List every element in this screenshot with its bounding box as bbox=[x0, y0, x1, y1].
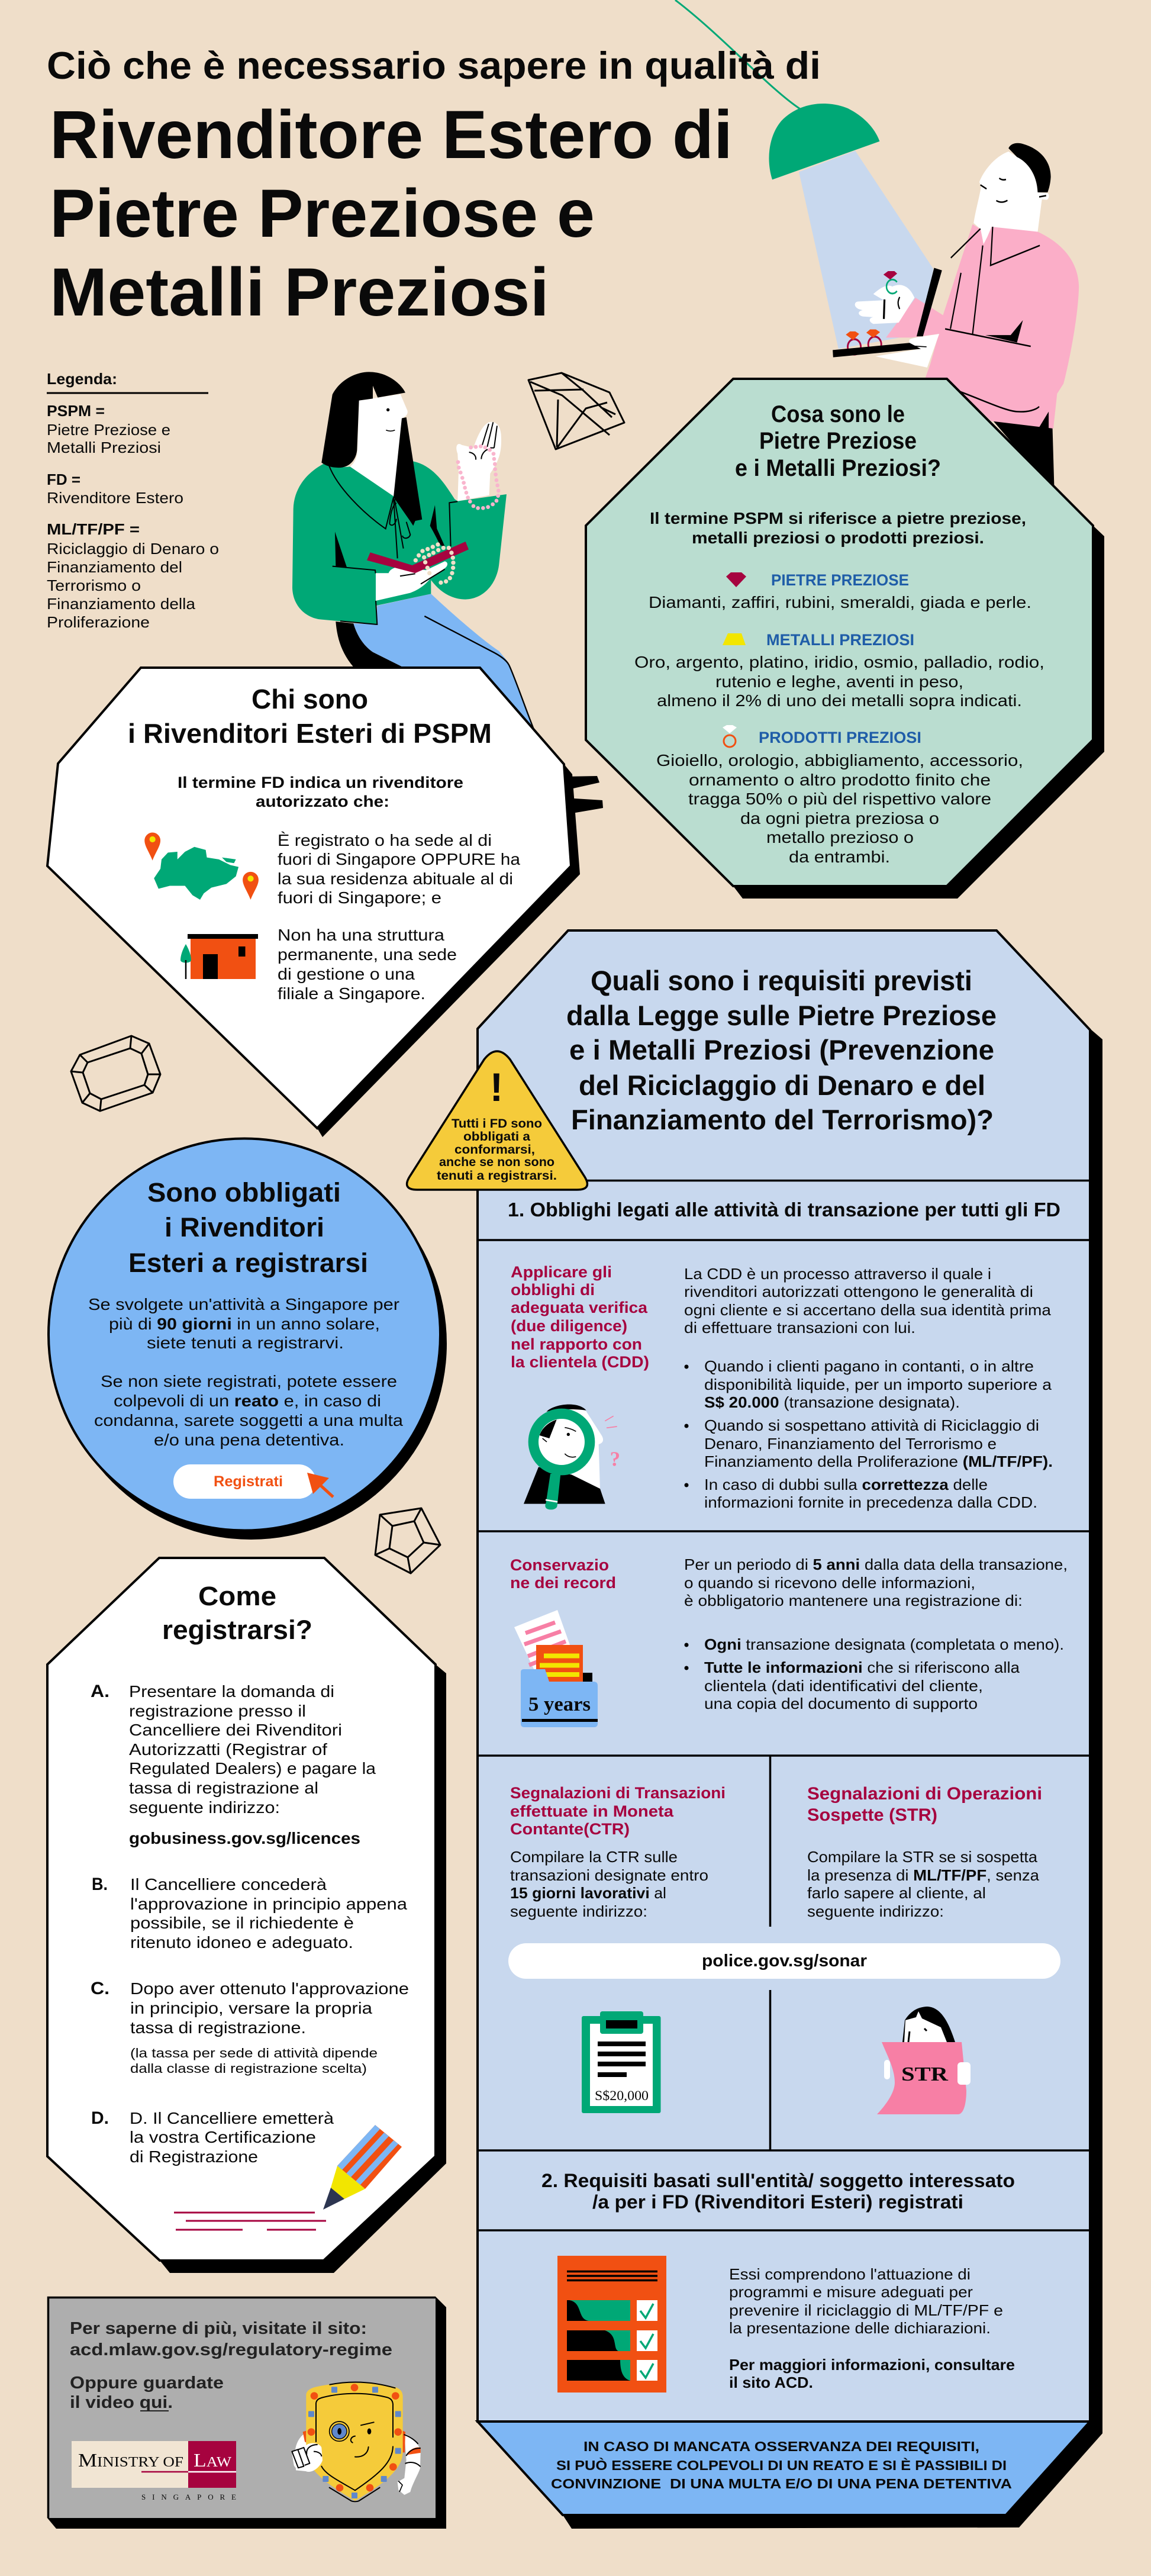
heading: obliged to register: Sono obbligati bbox=[147, 1177, 341, 1208]
logo: Ministry of Law: LAW bbox=[194, 2449, 231, 2471]
step A: Cancelliere dei Rivenditori bbox=[129, 1721, 342, 1739]
text: CDD explanation: S$ 20.000 (transazione designata). bbox=[704, 1393, 960, 1411]
banner: penalty warning: SI PUÒ ESSERE COLPEVOLI DI UN REATO E SI È PASSIBILI DI bbox=[556, 2457, 1007, 2473]
heading: requirements under the Act: del Riciclaggio di Denaro e del bbox=[579, 1070, 985, 1101]
text: precious products: da ogni pietra preziosa o bbox=[740, 809, 939, 827]
step B: Il Cancelliere concederà bbox=[130, 1875, 327, 1894]
text: precious stones: Diamanti, zaffiri, rubini, smeraldi, giada e perle. bbox=[649, 593, 1031, 611]
heading: CTR: Segnalazioni di Transazioni bbox=[510, 1784, 726, 1802]
text: entity requirements: il sito ACD. bbox=[729, 2374, 813, 2391]
title bbox=[47, 44, 821, 330]
callout: warning triangle: ! bbox=[490, 1065, 503, 1110]
callout: warning triangle bbox=[407, 1051, 587, 1190]
text: 90 days rule: siete tenuti a registrarvi. bbox=[147, 1334, 344, 1352]
panel: how to register bbox=[47, 1558, 446, 2273]
text: precious products: Gioiello, orologio, abbigliamento, accessorio, bbox=[656, 751, 1023, 769]
heading: record keeping bbox=[510, 1556, 616, 1592]
legend: Proliferazione bbox=[47, 613, 150, 631]
callout: warning triangle: anche se non sono bbox=[439, 1155, 554, 1169]
text: CDD explanation: informazioni fornite in precedenza dalla CDD. bbox=[704, 1493, 1037, 1511]
step A: Autorizzatti (Registrar of bbox=[129, 1740, 327, 1759]
text: CDD explanation: ogni cliente e si accertano della sua identità prima bbox=[684, 1301, 1052, 1319]
heading: STR: Segnalazioni di Operazioni bbox=[807, 1784, 1042, 1804]
text: CTR: 15 giorni lavorativi al bbox=[510, 1884, 666, 1902]
heading: who are FD: Chi sono bbox=[252, 684, 368, 714]
heading: CDD: la clientela (CDD) bbox=[511, 1353, 649, 1371]
step A: A. bbox=[91, 1682, 109, 1701]
callout: warning triangle: conformarsi, bbox=[454, 1143, 535, 1157]
legend bbox=[47, 370, 219, 631]
text: entity requirements: programmi e misure adeguati per bbox=[729, 2283, 973, 2301]
step A: Regulated Dealers) e pagare la bbox=[129, 1759, 376, 1778]
legend: PSPM = bbox=[47, 402, 105, 420]
text: 90 days rule: più di 90 giorni in un anno solare, bbox=[109, 1315, 380, 1333]
heading: CDD: nel rapporto con bbox=[511, 1335, 642, 1353]
text: precious metals: METALLI PREZIOSI bbox=[766, 631, 914, 649]
title: Ciò che è necessario sapere in qualità di bbox=[47, 44, 821, 87]
legend: Terrorismo o bbox=[47, 577, 141, 594]
step C: (la tassa per sede di attività dipende bbox=[130, 2046, 378, 2060]
icon: gold bar bbox=[723, 633, 746, 645]
heading: requirements under the Act: dalla Legge sulle Pietre Preziose bbox=[566, 1000, 997, 1031]
text: no permanent establishment: Non ha una struttura bbox=[278, 926, 444, 944]
heading: obliged to register: i Rivenditori bbox=[165, 1212, 324, 1242]
step D: la vostra Certificazione bbox=[130, 2128, 316, 2146]
text: precious products: PRODOTTI PREZIOSI bbox=[759, 729, 921, 746]
heading: CDD bbox=[511, 1263, 649, 1371]
icon: checklist document bbox=[557, 2256, 666, 2393]
button: register bbox=[173, 1464, 316, 1499]
step D bbox=[91, 2108, 334, 2166]
text: STR: seguente indirizzo: bbox=[807, 1902, 944, 1920]
step A: seguente indirizzo: bbox=[129, 1798, 280, 1817]
heading: STR: Sospette (STR) bbox=[807, 1805, 937, 1825]
heading: requirements under the Act: Finanziamento del Terrorismo)? bbox=[571, 1104, 994, 1135]
text: CDD explanation: La CDD è un processo attraverso il quale i bbox=[684, 1265, 991, 1283]
icon: building bbox=[180, 934, 258, 979]
text: registered outside Singapore: fuori di Singapore OPPURE ha bbox=[278, 850, 520, 868]
text: precious metals: Oro, argento, platino, iridio, osmio, palladio, rodio, bbox=[634, 653, 1044, 671]
heading: how to register: registrarsi? bbox=[162, 1615, 312, 1645]
step A: gobusiness.gov.sg/licences bbox=[129, 1829, 360, 1847]
heading: section 2: 2. Requisiti basati sull'entità/ soggetto interessato bbox=[541, 2170, 1015, 2191]
step A: tassa di registrazione al bbox=[129, 1779, 318, 1797]
text: 90 days rule: condanna, sarete soggetti a una multa bbox=[94, 1411, 403, 1429]
text: entity requirements: la presentazione delle dichiarazioni. bbox=[729, 2319, 991, 2337]
heading: CDD: obblighi di bbox=[511, 1281, 595, 1299]
title: Rivenditore Estero di bbox=[50, 97, 733, 173]
heading: obliged to register bbox=[128, 1177, 368, 1278]
text: precious products bbox=[656, 729, 1023, 866]
panel: requirements bbox=[478, 930, 1102, 2529]
text: 90 days rule: e/o una pena detentiva. bbox=[154, 1431, 344, 1449]
text: precious stones: PIETRE PREZIOSE bbox=[771, 571, 909, 589]
heading: CDD: Applicare gli bbox=[511, 1263, 612, 1281]
illustration: woman with pearls bbox=[292, 372, 534, 729]
heading: who are FD: i Rivenditori Esteri di PSPM bbox=[128, 718, 492, 749]
button: register: Registrati bbox=[214, 1473, 283, 1490]
step B: B. bbox=[92, 1875, 108, 1894]
step B: l'approvazione in principio appena bbox=[130, 1895, 407, 1913]
icon: Singapore map with pins bbox=[144, 833, 259, 900]
heading: section 2 bbox=[541, 2170, 1015, 2213]
text: FD definition: Il termine FD indica un rivenditore bbox=[178, 774, 463, 791]
legend: Legenda: bbox=[47, 370, 117, 388]
heading: how to register bbox=[162, 1581, 312, 1645]
text: visit the site: Per saperne di più, visitate il sito: bbox=[70, 2319, 367, 2338]
text: record keeping bbox=[684, 1556, 1068, 1712]
text: 90 days rule bbox=[88, 1295, 403, 1449]
step C: dalla classe di registrazione scelta) bbox=[130, 2061, 367, 2076]
text: CDD explanation: Denaro, Finanziamento del Terrorismo e bbox=[704, 1435, 997, 1453]
callout: warning triangle: Tutti i FD sono bbox=[452, 1117, 542, 1131]
step C: Dopo aver ottenuto l'approvazione bbox=[130, 1979, 409, 1998]
panel: must register bbox=[49, 1139, 447, 1540]
icon: pencil writing bbox=[174, 2125, 402, 2230]
heading: what are PSPM bbox=[735, 401, 941, 481]
heading: STR bbox=[807, 1784, 1042, 1825]
heading: who are FD bbox=[128, 684, 492, 749]
text: visit the site: acd.mlaw.gov.sg/regulatory-regime bbox=[70, 2340, 392, 2359]
text: PSPM definition bbox=[650, 509, 1026, 547]
heading: what are PSPM: Pietre Preziose bbox=[759, 428, 917, 454]
text: FD definition: autorizzato che: bbox=[256, 793, 389, 810]
icon: diamond ring bbox=[723, 725, 737, 747]
heading: CTR: Contante(CTR) bbox=[510, 1820, 630, 1838]
step B: ritenuto idoneo e adeguato. bbox=[130, 1933, 353, 1952]
legend: ML/TF/PF = bbox=[47, 520, 140, 538]
heading: what are PSPM: Cosa sono le bbox=[771, 401, 905, 427]
step D: D. Il Cancelliere emetterà bbox=[130, 2109, 334, 2127]
text: precious products: ornamento o altro prodotto finito che bbox=[689, 771, 991, 789]
text: record keeping: una copia del documento di supporto bbox=[704, 1695, 978, 1712]
text: entity requirements: Essi comprendono l'attuazione di bbox=[729, 2265, 971, 2283]
banner: penalty warning: CONVINZIONE DI UNA MULTA E/O DI UNA PENA DETENTIVA bbox=[551, 2476, 1012, 2491]
text: entity requirements: prevenire il riciclaggio di ML/TF/PF e bbox=[729, 2301, 1003, 2319]
step B: possibile, se il richiedente è bbox=[130, 1914, 354, 1932]
icon: 5 years folder bbox=[514, 1610, 598, 1727]
legend: Finanziamento del bbox=[47, 558, 182, 576]
icon: 5 years folder: 5 years bbox=[528, 1693, 591, 1715]
text: CDD explanation: Quando si sospettano attività di Riciclaggio di bbox=[704, 1416, 1039, 1434]
text: STR: farlo sapere al cliente, al bbox=[807, 1884, 986, 1902]
text: registered outside Singapore: fuori di Singapore; e bbox=[278, 888, 441, 907]
logo: Ministry of Law bbox=[72, 2441, 236, 2501]
legend: Rivenditore Estero bbox=[47, 489, 183, 507]
text: no permanent establishment: di gestione o una bbox=[278, 965, 415, 983]
heading: CTR bbox=[510, 1784, 726, 1838]
icon: octagon gem outline bbox=[71, 1036, 160, 1111]
logo: Ministry of Law: MINISTRY OF bbox=[78, 2449, 183, 2471]
text: 90 days rule: colpevoli di un reato e, in caso di bbox=[114, 1392, 381, 1410]
heading: CTR: effettuate in Moneta bbox=[510, 1802, 674, 1820]
text: STR bbox=[807, 1848, 1040, 1920]
text: CDD explanation: Quando i clienti pagano in contanti, o in altre bbox=[704, 1357, 1034, 1375]
heading: requirements under the Act: e i Metalli Preziosi (Prevenzione bbox=[569, 1034, 994, 1065]
legend: FD = bbox=[47, 471, 80, 488]
text: PSPM definition: Il termine PSPM si riferisce a pietre preziose, bbox=[650, 509, 1026, 527]
text: precious metals: almeno il 2% di uno dei metalli sopra indicati. bbox=[657, 691, 1022, 710]
text: record keeping: è obbligatorio mantenere una registrazione di: bbox=[684, 1592, 1023, 1609]
text: precious metals bbox=[634, 631, 1044, 710]
legend: Metalli Preziosi bbox=[47, 439, 161, 456]
text: 90 days rule: Se non siete registrati, potete essere bbox=[101, 1372, 397, 1390]
text: CDD explanation: In caso di dubbi sulla correttezza delle bbox=[704, 1476, 988, 1493]
step C: tassa di registrazione. bbox=[130, 2018, 306, 2037]
heading: record keeping: Conservazio bbox=[510, 1556, 609, 1574]
text: record keeping: o quando si ricevono delle informazioni, bbox=[684, 1574, 975, 1592]
text: CTR: Compilare la CTR sulle bbox=[510, 1848, 678, 1866]
icon: red gem bbox=[726, 572, 746, 587]
heading: CDD: (due diligence) bbox=[511, 1317, 627, 1335]
link pill: police.gov.sg/sonar: police.gov.sg/sonar bbox=[702, 1952, 867, 1970]
panel: what are precious stones and metals bbox=[586, 379, 1104, 899]
text: CDD explanation: disponibilità liquide, per un importo superiore a bbox=[704, 1376, 1052, 1393]
text: CTR: seguente indirizzo: bbox=[510, 1902, 647, 1920]
step B bbox=[92, 1875, 407, 1952]
icon: man with magnifier: ? bbox=[610, 1448, 620, 1471]
step A: Presentare la domanda di bbox=[129, 1682, 334, 1701]
title: Pietre Preziose e bbox=[50, 176, 595, 252]
heading: section 2: /a per i FD (Rivenditori Esteri) registrati bbox=[592, 2191, 963, 2213]
text: STR: Compilare la STR se si sospetta bbox=[807, 1848, 1038, 1866]
text: no permanent establishment: permanente, una sede bbox=[278, 945, 457, 964]
icon: pentagon gem outline bbox=[375, 1508, 440, 1573]
text: precious products: da entrambi. bbox=[789, 848, 890, 866]
icon: woman holding STR paper bbox=[877, 2007, 971, 2114]
step A: registrazione presso il bbox=[129, 1702, 306, 1720]
icon: man with magnifier bbox=[524, 1405, 620, 1509]
step D: di Registrazione bbox=[130, 2147, 258, 2166]
text: CDD explanation: Finanziamento della Proliferazione (ML/TF/PF). bbox=[704, 1453, 1053, 1470]
legend: Pietre Preziose e bbox=[47, 421, 170, 439]
text: registered outside Singapore: È registrato o ha sede al di bbox=[278, 831, 492, 849]
text: entity requirements bbox=[729, 2265, 1015, 2391]
step A bbox=[91, 1682, 376, 1847]
text: precious products: metallo prezioso o bbox=[766, 828, 914, 846]
text: CTR: transazioni designate entro bbox=[510, 1866, 708, 1884]
logo: Ministry of Law: SINGAPORE bbox=[141, 2493, 236, 2501]
text: record keeping: clientela (dati identificativi del cliente, bbox=[704, 1677, 983, 1695]
banner: penalty warning bbox=[478, 2422, 1090, 2515]
text: no permanent establishment: filiale a Singapore. bbox=[278, 984, 425, 1003]
title: Metalli Preziosi bbox=[50, 255, 549, 330]
text: FD definition bbox=[178, 774, 463, 810]
heading: what are PSPM: e i Metalli Preziosi? bbox=[735, 455, 941, 481]
heading: record keeping: ne dei record bbox=[510, 1574, 616, 1592]
illustration: jeweller under lamp bbox=[675, 0, 1079, 485]
text: record keeping: Tutte le informazioni che si riferiscono alla bbox=[704, 1659, 1020, 1676]
panel: more information bbox=[47, 2297, 446, 2529]
heading: section 1: 1. Obblighi legati alle attività di transazione per tutti gli FD bbox=[508, 1199, 1060, 1221]
banner: penalty warning: IN CASO DI MANCATA OSSERVANZA DEI REQUISITI, bbox=[583, 2439, 979, 2454]
heading: CDD: adeguata verifica bbox=[511, 1299, 648, 1316]
text: registered outside Singapore: la sua residenza abituale al di bbox=[278, 870, 513, 888]
icon: diamond outline bbox=[528, 373, 624, 449]
step C: in principio, versare la propria bbox=[130, 1999, 372, 2017]
legend: Finanziamento della bbox=[47, 595, 196, 613]
illustration: shield mascot bbox=[292, 2382, 421, 2501]
text: CDD explanation: di effettuare transazioni con lui. bbox=[684, 1319, 915, 1337]
heading: how to register: Come bbox=[198, 1581, 276, 1611]
panel: who are foreign dealers bbox=[47, 668, 603, 1137]
step C bbox=[91, 1979, 409, 2076]
link pill: police.gov.sg/sonar bbox=[508, 1943, 1060, 1979]
text: entity requirements: Per maggiori informazioni, consultare bbox=[729, 2356, 1015, 2374]
text: registered outside Singapore bbox=[278, 831, 520, 907]
text: STR: la presenza di ML/TF/PF , senza bbox=[807, 1866, 1040, 1884]
icon: woman holding STR paper: STR bbox=[901, 2063, 949, 2085]
text: CDD explanation bbox=[684, 1265, 1053, 1511]
heading: requirements under the Act: Quali sono i requisiti previsti bbox=[591, 965, 972, 996]
heading: obliged to register: Esteri a registrarsi bbox=[128, 1248, 368, 1278]
step C: C. bbox=[91, 1979, 109, 1998]
text: visit the site: il video qui. bbox=[70, 2393, 173, 2412]
text: record keeping: Ogni transazione designata (completata o meno). bbox=[704, 1635, 1064, 1653]
text: 90 days rule: Se svolgete un'attività a Singapore per bbox=[88, 1295, 399, 1313]
arrow: to register button bbox=[307, 1473, 333, 1497]
icon: clipboard S$20,000 bbox=[582, 2011, 660, 2113]
step D: D. bbox=[91, 2108, 109, 2128]
text: PSPM definition: metalli preziosi o prodotti preziosi. bbox=[692, 529, 984, 547]
legend: Riciclaggio di Denaro o bbox=[47, 540, 219, 558]
icon: clipboard S$20,000: S$20,000 bbox=[595, 2088, 649, 2103]
text: no permanent establishment bbox=[278, 926, 457, 1003]
text: CDD explanation: rivenditori autorizzati ottengono le generalità di bbox=[684, 1283, 1033, 1300]
callout: warning triangle: obbligati a bbox=[463, 1130, 530, 1144]
text: precious products: tragga 50% o più del rispettivo valore bbox=[688, 790, 991, 808]
text: visit the site bbox=[70, 2319, 392, 2412]
callout: warning triangle: tenuti a registrarsi. bbox=[437, 1169, 557, 1183]
text: record keeping: Per un periodo di 5 anni dalla data della transazione, bbox=[684, 1556, 1068, 1573]
text: precious metals: rutenio e leghe, aventi in peso, bbox=[715, 672, 963, 691]
text: visit the site: Oppure guardate bbox=[70, 2374, 224, 2393]
text: CTR bbox=[510, 1848, 708, 1920]
text: precious stones bbox=[649, 571, 1031, 611]
heading: requirements under the Act bbox=[566, 965, 997, 1135]
